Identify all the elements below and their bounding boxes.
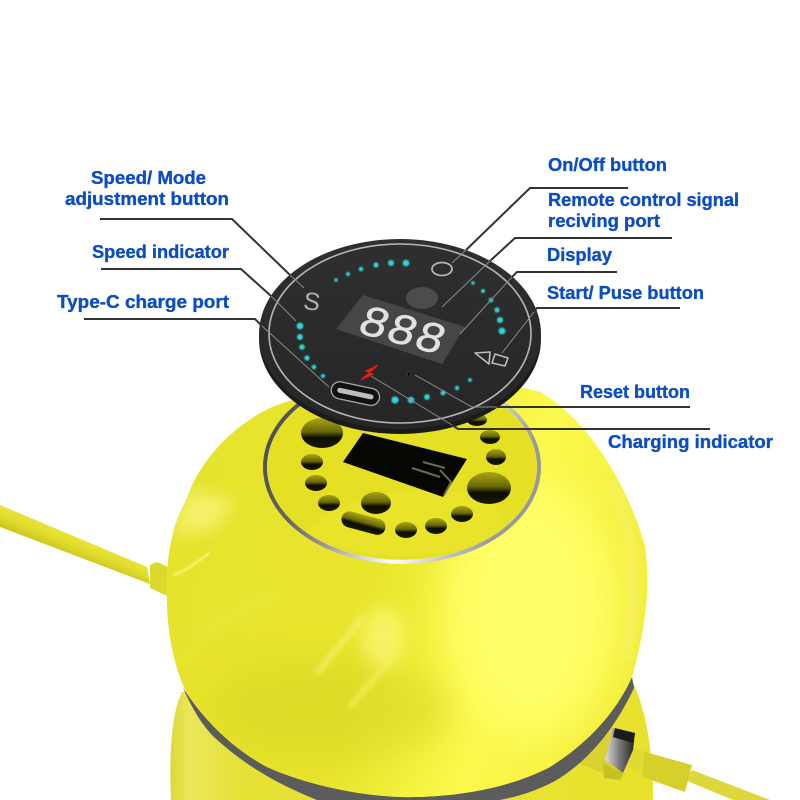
label: Start/ Puse button: Start/ Puse button xyxy=(547,283,704,303)
right rim highlight xyxy=(610,480,633,660)
remote signal port xyxy=(406,287,438,309)
label: Remote control signal receiving port xyxy=(548,190,739,231)
panel ring xyxy=(269,244,531,423)
label: Speed/ Mode adjustment button: adjustment button xyxy=(65,189,229,209)
upper body of the device xyxy=(167,381,647,797)
upper-left highlight xyxy=(172,490,235,535)
dark lower-left shading xyxy=(240,672,454,752)
on/off button xyxy=(432,262,452,276)
label: Speed indicator: Speed indicator xyxy=(92,242,229,262)
label: Type-C charge port: Type-C charge port xyxy=(57,292,229,312)
usb-c port xyxy=(330,380,381,407)
label: On/Off button: On/Off button xyxy=(548,155,667,175)
leader lines xyxy=(84,188,710,429)
S button: S xyxy=(302,287,322,317)
left cable xyxy=(0,505,168,596)
rectangular opening xyxy=(343,433,467,497)
dark band between the spheres xyxy=(183,677,634,800)
recessed top with metal ring xyxy=(263,370,541,564)
speed indicator lights xyxy=(297,260,505,404)
display window xyxy=(336,295,465,364)
lower sphere of the device xyxy=(170,680,653,800)
right cable and connector xyxy=(578,726,770,800)
label: Speed/ Mode adjustment button xyxy=(65,168,229,209)
label: Remote control signal receiving port: reciving port xyxy=(548,211,660,231)
label: Remote control signal receiving port: Remote control signal xyxy=(548,190,739,210)
label: Display: Display xyxy=(547,245,612,265)
label: Charging indicator: Charging indicator xyxy=(608,432,773,452)
reset pinhole xyxy=(407,372,411,376)
label: Reset button: Reset button xyxy=(580,382,690,402)
control panel disc xyxy=(259,239,541,434)
vent holes xyxy=(301,414,511,538)
start/pause button xyxy=(475,352,508,366)
digits: 888 xyxy=(349,298,453,368)
bright right shading xyxy=(445,480,615,740)
charging bolt xyxy=(361,365,378,380)
label: Speed/ Mode adjustment button: Speed/ Mode xyxy=(91,168,206,188)
central glow and streaks xyxy=(361,607,405,667)
